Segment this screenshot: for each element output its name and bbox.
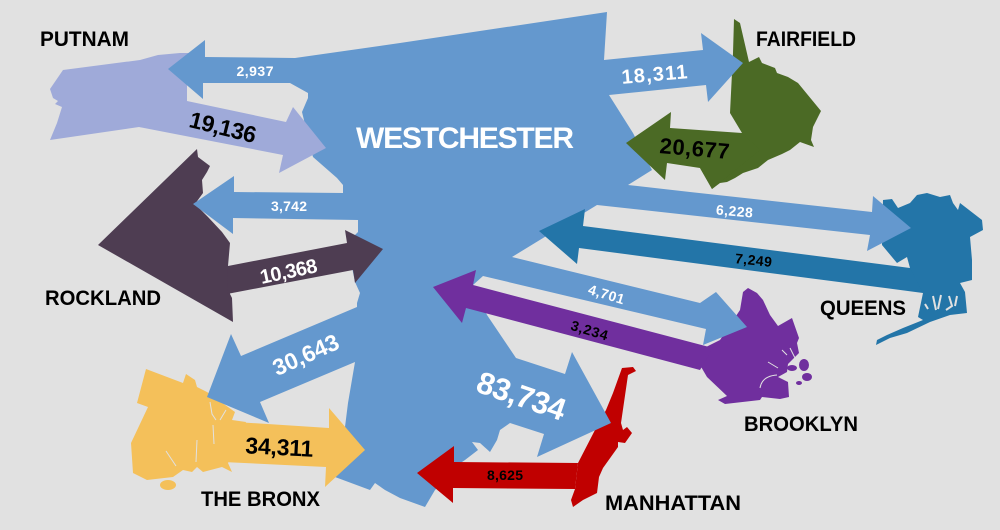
label: FAIRFIELD: FAIRFIELD [756,28,856,51]
county: Rockland [98,149,233,322]
label: QUEENS: QUEENS [820,297,906,320]
value: 7,249: 7,249 [734,250,773,270]
county: Brooklyn [700,288,812,404]
arrow: Rockland inflow [227,230,383,294]
arrow: Bronx inflow [220,408,365,487]
value: 30,643: 30,643 [268,329,343,381]
label: BROOKLYN: BROOKLYN [744,413,858,436]
value: 2,937: 2,937 [236,63,274,79]
arrow: Fairfield outflow [626,112,760,189]
label: PUTNAM: PUTNAM [40,28,129,51]
county: Queens [876,193,983,345]
county and arrows: Westchester [168,12,911,507]
value: 10,368: 10,368 [258,255,319,289]
value: 3,234: 3,234 [569,317,610,343]
county: Putnam [50,53,200,140]
value: 8,625: 8,625 [487,467,523,483]
value: 18,311: 18,311 [621,61,688,89]
arrow: Manhattan outflow [417,446,578,503]
county: Fairfield [700,19,821,189]
label: ROCKLAND: ROCKLAND [45,287,161,310]
value: 4,701: 4,701 [586,281,627,307]
value: 6,228: 6,228 [715,201,754,221]
value: 19,136: 19,136 [187,106,259,148]
value: 3,742: 3,742 [271,198,307,214]
label: MANHATTAN: MANHATTAN [605,492,741,515]
county: Manhattan [571,367,636,507]
arrow: Brooklyn outflow [433,270,713,370]
label: WESTCHESTER: WESTCHESTER [356,122,574,155]
value: 34,311: 34,311 [245,432,314,462]
arrow: Putnam inflow [139,87,326,173]
arrow: Queens outflow [539,209,923,293]
value: 83,734: 83,734 [472,365,571,428]
value: 20,677: 20,677 [659,133,731,164]
label: THE BRONX: THE BRONX [201,488,320,511]
county: The Bronx [131,369,246,490]
